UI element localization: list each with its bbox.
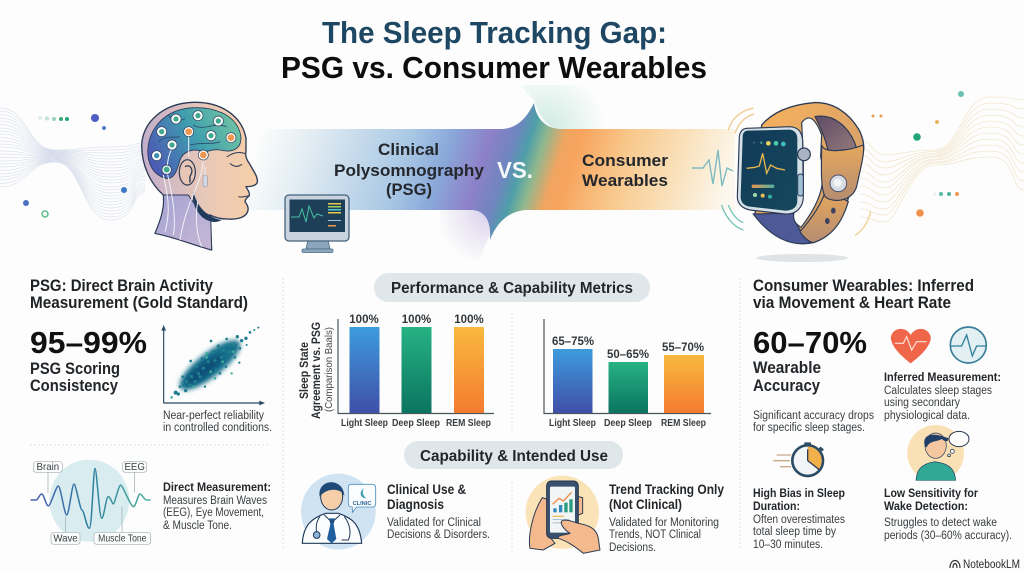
heading: PSG: PSG: Direct Brain Activity	[30, 277, 214, 295]
bar categories	[549, 417, 706, 429]
panel: wearables	[753, 277, 1012, 551]
bar values	[349, 314, 484, 326]
text: low sensitivity	[884, 488, 1012, 542]
bar chart: wearables	[544, 319, 711, 429]
bar values: 100%	[349, 314, 379, 326]
text: trend tracking: Decisions.	[609, 542, 656, 554]
heading pill: metrics	[374, 273, 650, 302]
icon: smartwatch	[722, 103, 871, 244]
bar categories: Deep Sleep	[392, 417, 440, 429]
text: inferred measurement: Calculates sleep stages	[884, 385, 992, 397]
text: direct measurement: Measures Brain Waves	[163, 495, 267, 507]
heading: PSG	[30, 277, 248, 312]
icon: person with thought bubble	[907, 425, 969, 482]
bar values: 55–70%	[662, 342, 704, 354]
stat: 60–70%: Accuracy	[753, 376, 820, 395]
text: low sensitivity: Wake Detection:	[884, 501, 968, 513]
bar categories: Light Sleep	[341, 417, 388, 429]
ribbon label: PSG: Clinical	[378, 140, 439, 159]
text: accuracy drops: for specific sleep stages.	[753, 422, 865, 434]
right decorative wave	[860, 97, 1024, 222]
panel: capability	[301, 441, 724, 554]
text: high bias: total sleep time by	[753, 526, 836, 538]
stat: 60–70%: 60–70%	[753, 325, 867, 360]
ribbon label: wearables	[582, 151, 668, 190]
bar chart: PSG	[297, 314, 494, 429]
text: inferred measurement	[884, 372, 1001, 422]
ribbon label: wearables: Consumer	[582, 151, 668, 170]
icon: doctor: CLINIC	[353, 501, 371, 507]
text: trend tracking: Validated for Monitoring	[609, 517, 719, 529]
stat: 95–99%: Consistency	[30, 376, 118, 395]
text: trend tracking: Trends, NOT Clinical	[609, 529, 701, 541]
scatter caption: Near-perfect reliability	[163, 410, 264, 422]
scatter caption: in controlled conditions.	[163, 422, 272, 434]
ribbon label: PSG: (PSG)	[386, 180, 432, 199]
bar categories	[341, 417, 491, 429]
text: trend tracking	[609, 482, 724, 554]
text: trend tracking: Trend Tracking Only	[609, 482, 724, 497]
text: direct measurement: (EEG), Eye Movement,	[163, 507, 264, 519]
text: inferred measurement: Inferred Measurement:	[884, 372, 1001, 384]
stat: 60–70%: Wearable	[753, 358, 821, 377]
label: Muscle Tone: Muscle Tone	[98, 534, 146, 545]
heading: PSG: Measurement (Gold Standard)	[30, 294, 248, 312]
heading: wearables: Consumer Wearables: Inferred	[753, 277, 974, 295]
ribbon label: PSG: Polysomnography	[334, 161, 485, 180]
text: high bias	[753, 488, 845, 551]
heading pill: capability: Capability & Intended Use	[420, 448, 608, 465]
text: direct measurement	[163, 482, 271, 532]
ribbon label: vs: VS.	[497, 157, 533, 183]
bar categories: Deep Sleep	[604, 417, 652, 429]
text: inferred measurement: using secondary	[884, 397, 960, 409]
text: clinical use: Validated for Clinical	[387, 517, 481, 529]
bar: deep sleep	[608, 362, 648, 413]
decorative particles left	[23, 114, 127, 217]
heading pill: capability	[404, 441, 623, 469]
stat: 60–70%	[753, 325, 867, 395]
icon: monitor	[285, 195, 349, 252]
bar: REM sleep	[454, 327, 484, 413]
y-axis title	[297, 322, 335, 419]
bar: deep sleep	[402, 327, 432, 413]
decorative particles right	[872, 91, 964, 217]
bar values: 65–75%	[552, 336, 594, 348]
text: high bias: Often overestimates	[753, 514, 845, 526]
title: The Sleep Tracking Gap:	[322, 15, 667, 50]
text: low sensitivity: Struggles to detect wake	[884, 517, 997, 529]
y-axis title: (Comparison Baals)	[323, 327, 335, 412]
title: PSG vs. Consumer Wearables	[281, 50, 707, 85]
heading pill: metrics: Performance & Capability Metrics	[391, 280, 633, 297]
icon: doctor	[301, 474, 376, 550]
watch shadow	[756, 254, 848, 262]
text: accuracy drops: Significant accuracy drops	[753, 410, 874, 422]
bar values	[552, 336, 704, 361]
text: direct measurement: Direct Measurement:	[163, 482, 271, 494]
icon: pulse circle	[950, 327, 987, 363]
stat: 95–99%: 95–99%	[30, 325, 147, 360]
ribbon label: PSG	[334, 140, 485, 199]
text: low sensitivity: Low Sensitivity for	[884, 488, 978, 500]
text: low sensitivity: periods (30–60% accuracy).	[884, 530, 1012, 542]
icon: pulse next to watch	[692, 150, 733, 186]
text: clinical use: Diagnosis	[387, 497, 444, 512]
text: clinical use: Clinical Use &	[387, 482, 466, 497]
text: clinical use	[387, 482, 490, 541]
text: clinical use: Decisions & Disorders.	[387, 529, 490, 541]
bar categories: REM Sleep	[446, 417, 491, 429]
text: inferred measurement: physiological data.	[884, 410, 970, 422]
text: high bias: Duration:	[753, 501, 800, 513]
left decorative wave	[0, 108, 145, 220]
text: direct measurement: & Muscle Tone.	[163, 520, 232, 532]
bar values: 50–65%	[607, 349, 649, 361]
stat: 95–99%	[30, 325, 147, 395]
icon: heart	[891, 329, 931, 363]
label: Wave: Wave	[53, 534, 78, 545]
bar values: 100%	[454, 314, 484, 326]
bar categories: REM Sleep	[661, 417, 706, 429]
bar: light sleep	[553, 349, 592, 413]
scatter chart	[161, 325, 265, 405]
ribbon label: wearables: Wearables	[582, 171, 668, 190]
bar: REM sleep	[664, 355, 704, 413]
label: Brain: Brain	[37, 462, 59, 473]
bar categories: Light Sleep	[549, 417, 596, 429]
heading: wearables	[753, 277, 974, 312]
y-axis title: Sleep State	[297, 342, 311, 399]
title	[281, 15, 707, 85]
label: EEG: EEG	[124, 462, 145, 473]
scatter caption	[163, 410, 272, 434]
panel: metrics	[297, 273, 711, 429]
text: high bias: 10–30 minutes.	[753, 539, 823, 551]
text: trend tracking: (Not Clinical)	[609, 497, 682, 512]
text: accuracy drops	[753, 410, 874, 434]
comparison ribbon	[248, 85, 735, 262]
bar: light sleep	[350, 327, 380, 413]
icon: head with EEG electrodes	[142, 102, 257, 250]
panel: PSG	[30, 277, 272, 545]
heading: wearables: via Movement & Heart Rate	[753, 294, 951, 312]
stat: 95–99%: PSG Scoring	[30, 359, 120, 378]
EEG diagram	[31, 460, 151, 545]
y-axis title: Agreement vs. PSG	[309, 322, 323, 419]
text: high bias: High Bias in Sleep	[753, 488, 845, 500]
icon: phone in hands	[526, 476, 600, 553]
icon: stopwatch	[773, 442, 824, 476]
bar values: 100%	[402, 314, 431, 326]
